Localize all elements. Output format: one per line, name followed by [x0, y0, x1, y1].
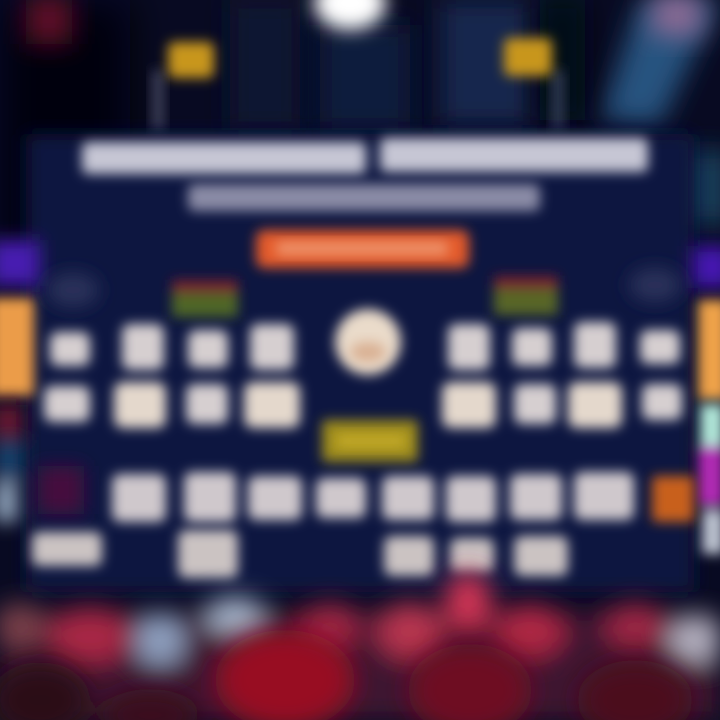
icon: left yellow lamp: [152, 42, 214, 132]
schedule: first row: [112, 472, 634, 522]
badge: orange date pill: [256, 230, 469, 268]
side banner: left orange: [0, 298, 34, 396]
crowd: background heads: [0, 572, 720, 720]
crowd: foreground heads: [0, 630, 693, 720]
side banner: left purple: [0, 240, 40, 286]
side strip: right colours: [698, 404, 720, 554]
subtitle: [188, 184, 540, 211]
decoration: pink top-right light: [652, 0, 702, 36]
schedule: second row: [32, 530, 568, 578]
side banner: right purple: [692, 246, 720, 288]
label: right outer round: [629, 268, 681, 302]
panel: bracket board: [26, 134, 694, 592]
side strip: left colours: [0, 405, 24, 522]
badge: right orange square: [652, 476, 694, 522]
label: right inner round: [494, 276, 558, 315]
label: left inner round: [172, 280, 238, 317]
title: [82, 138, 648, 174]
badge: left maroon square: [38, 466, 84, 514]
bracket: left side teams: [44, 324, 300, 428]
side banner: right orange: [698, 300, 720, 400]
badge: yellow label: [322, 420, 418, 462]
icon: centre trophy ball: [335, 309, 401, 375]
bracket: right side teams: [442, 322, 682, 428]
spotlight: [314, 0, 386, 30]
icon: right yellow lamp: [504, 38, 564, 130]
label: left outer round: [47, 273, 99, 307]
decoration: red corner banner: [26, 0, 72, 44]
